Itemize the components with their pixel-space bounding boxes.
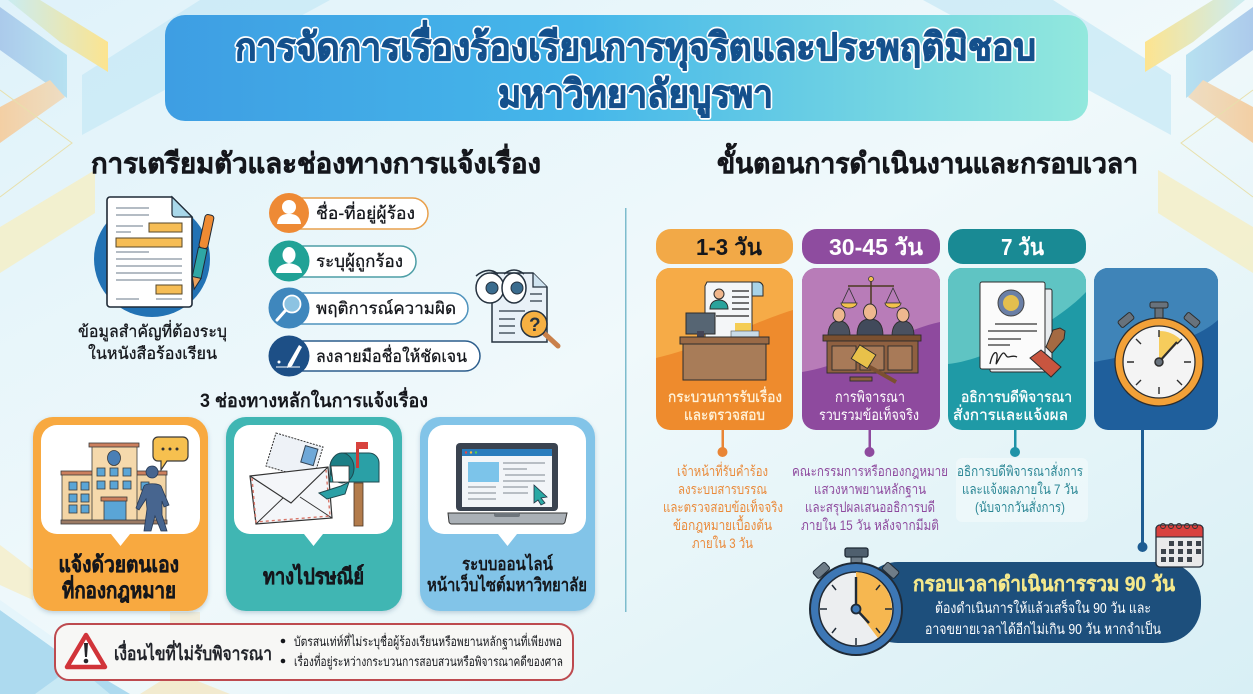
card: receiving and checking step: กระบวนการรับเรื่อง: [668, 386, 782, 406]
icon: laptop: [448, 443, 567, 524]
title banner: การจัดการเรื่องร้องเรียนการทุจริตและประพฤติมิชอบ: [235, 20, 1036, 71]
card: receiving and checking step: [656, 268, 793, 430]
callout: conditions not accepted: บัตรสนเท่ห์ที่ไม่ระบุชื่อผู้ร้องเรียนหรือพยานหลักฐานที่เพียงพอ: [294, 633, 562, 650]
badge: 30-45 days: 30-45 วัน: [829, 234, 923, 260]
icon: desk with scroll: [680, 282, 769, 380]
badge: 7 days: [948, 229, 1086, 264]
text: step 1 detail: เจ้าหน้าที่รับคำร้อง: [677, 462, 768, 479]
icon: stopwatch with quarter wedge: [1115, 302, 1203, 406]
card: fact gathering step: [802, 268, 940, 430]
banner: 90-day total timeframe: อาจขยายเวลาได้อีกไม่เกิน 90 วัน หากจำเป็น: [925, 619, 1161, 638]
card: by post: ทางไปรษณีย์: [263, 563, 364, 589]
text: step 2 detail: และสรุปผลเสนออธิการบดี: [805, 499, 935, 516]
connector: blue stopwatch to total timeframe: [1138, 430, 1148, 552]
card: online system: หน้าเว็บไซต์มหาวิทยาลัย: [427, 573, 587, 595]
badge: 1-3 days: [656, 229, 793, 264]
card: in person at legal division: ที่กองกฎหมาย: [62, 574, 176, 603]
badge: 7 days: 7 วัน: [1001, 234, 1044, 260]
title banner: มหาวิทยาลัยบูรพา: [498, 74, 773, 118]
text: step 1 detail: ข้อกฎหมายเบื้องต้น: [673, 515, 772, 533]
callout: conditions not accepted: เงื่อนไขที่ไม่รับพิจารณา: [114, 640, 272, 665]
pill: accused person: ระบุผู้ถูกร้อง: [316, 252, 403, 272]
text: step 3 detail: (นับจากวันสั่งการ): [975, 498, 1065, 515]
icon: complaint document with pen: [94, 197, 214, 317]
card: online system: ระบบออนไลน์: [462, 553, 554, 574]
card: rector's order step: สั่งการและแจ้งผล: [953, 404, 1068, 424]
card: online system: [420, 417, 595, 611]
badge: 1-3 days: 1-3 วัน: [696, 234, 762, 260]
text: step 2 detail: ภายใน 15 วัน หลังจากมีมติ: [801, 517, 939, 533]
icon: document with eyes and question magnifier: ?: [529, 315, 541, 336]
pill: misconduct behaviour: พฤติการณ์ความผิด: [316, 299, 456, 318]
text: step 2 detail: คณะกรรมการหรือกองกฎหมาย: [792, 463, 948, 479]
title banner: มหาวิทยาลัยบูรพา: [498, 74, 773, 118]
callout: conditions not accepted: [55, 624, 573, 680]
icon: calendar: [1156, 524, 1203, 567]
banner: 90-day total timeframe: ต้องดำเนินการให้แล้วเสร็จใน 90 วัน และ: [935, 598, 1151, 617]
heading: preparation and channels: การเตรียมตัวและช่องทางการแจ้งเรื่อง: [91, 143, 541, 179]
card: fact gathering step: การพิจารณา: [835, 389, 905, 406]
pill: complainant name and address: ชื่อ-ที่อยู่ผู้ร้อง: [316, 201, 415, 224]
pill: accused person: [268, 240, 416, 282]
text: key information caption: ข้อมูลสำคัญที่ต้องระบุ: [78, 320, 227, 342]
card: stopwatch: [1094, 268, 1218, 430]
pill: misconduct behaviour: [268, 288, 468, 328]
heading: process and timeframe: ขั้นตอนการดำเนินงานและกรอบเวลา: [717, 142, 1138, 179]
connector: orange step: [718, 430, 728, 457]
banner: 90-day total timeframe: กรอบเวลาดำเนินการรวม 90 วัน: [913, 573, 1176, 596]
text: step 1 detail: ภายใน 3 วัน: [692, 535, 753, 551]
text: step 3 detail: และแจ้งผลภายใน 7 วัน: [962, 481, 1078, 497]
pill: clear signature: ลงลายมือชื่อให้ชัดเจน: [316, 344, 467, 366]
text: step 2 detail: แสวงหาพยานหลักฐาน: [814, 481, 926, 498]
card: in person at legal division: แจ้งด้วยตนเอง: [58, 552, 179, 577]
heading: three main channels: 3 ช่องทางหลักในการแจ้งเรื่อง: [200, 387, 428, 412]
card: receiving and checking step: และตรวจสอบ: [684, 407, 765, 424]
icon: warning triangle: [67, 635, 105, 667]
text: step 2 detail: [792, 463, 948, 533]
title banner: การจัดการเรื่องร้องเรียนการทุจริตและประพฤติมิชอบ: [235, 20, 1036, 71]
text: step 3 detail: [956, 458, 1088, 522]
icon: judges, bench and gavel: [823, 276, 921, 382]
icon: letters and mailbox: [250, 433, 379, 526]
card: rector's order step: [948, 268, 1086, 430]
card: rector's order step: อธิการบดีพิจารณา: [961, 389, 1072, 406]
text: step 1 detail: [663, 462, 783, 551]
connector: teal step: [1010, 430, 1020, 457]
banner: 90-day total timeframe: [860, 562, 1201, 643]
text: step 1 detail: และตรวจสอบข้อเท็จจริง: [663, 498, 783, 515]
text: step 3 detail: อธิการบดีพิจารณาสั่งการ: [957, 462, 1083, 479]
title banner: [165, 15, 1088, 121]
card: in person at legal division: [33, 417, 208, 611]
connector: purple step: [864, 430, 874, 457]
icon: document with eyes and question magnifier: [476, 270, 558, 346]
pill: complainant name and address: [269, 193, 428, 233]
text: key information caption: [78, 320, 227, 363]
icon: building and visitor: [61, 443, 167, 524]
card: fact gathering step: รวบรวมข้อเท็จจริง: [819, 405, 919, 424]
text: key information caption: ในหนังสือร้องเรียน: [88, 344, 217, 363]
text: step 1 detail: ลงระบบสารบรรณ: [678, 481, 767, 497]
callout: conditions not accepted: เรื่องที่อยู่ระหว่างกระบวนการสอบสวนหรือพิจารณาคดีของศาล: [294, 653, 563, 670]
icon: document with seal and stamp: [980, 282, 1065, 377]
card: by post: [226, 417, 402, 611]
badge: 30-45 days: [802, 229, 940, 264]
pill: clear signature: [268, 336, 480, 376]
icon: large stopwatch: [810, 548, 902, 655]
